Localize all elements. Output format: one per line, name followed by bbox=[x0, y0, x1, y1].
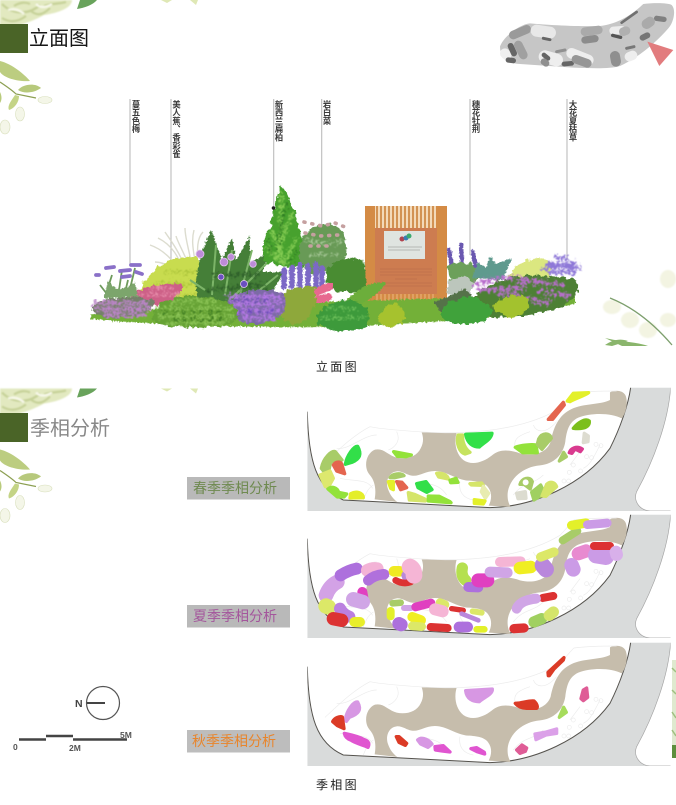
label: spring: 春季季相分析 bbox=[193, 480, 277, 496]
dark grass bbox=[434, 288, 475, 320]
plant labels bbox=[131, 99, 578, 159]
marker: view direction bbox=[647, 42, 673, 66]
cypress tree bbox=[263, 186, 305, 270]
coneflower shrub bbox=[299, 224, 346, 276]
canna leaves bbox=[196, 230, 284, 305]
grey foliage bbox=[447, 276, 474, 296]
title: seasonal analysis: 季相分析 bbox=[30, 417, 110, 440]
pink-purple flowers right bbox=[476, 277, 572, 303]
purple flowering mass bbox=[226, 290, 286, 324]
title marker: elevation bbox=[0, 24, 28, 53]
panel: autumn plan bbox=[307, 643, 671, 766]
autumn planting bbox=[333, 658, 588, 754]
pink astilbe bbox=[316, 286, 330, 300]
caption: seasonal: 季相图 bbox=[316, 778, 359, 792]
plant labels: 新西兰扁柏 bbox=[274, 99, 284, 143]
round shrub bbox=[326, 259, 368, 292]
right purple spikes bbox=[449, 245, 476, 270]
spring planting bbox=[320, 393, 589, 504]
panel: summer plan bbox=[307, 515, 671, 638]
label: summer: 夏季季相分析 bbox=[193, 608, 277, 624]
label: autumn bbox=[187, 730, 290, 752]
fern left of sign bbox=[345, 282, 386, 306]
pale yellow grass bbox=[508, 258, 552, 284]
pink heather bbox=[128, 284, 181, 305]
lavender bbox=[284, 264, 322, 287]
green hedge bbox=[152, 296, 238, 327]
caption: elevation: 立面图 bbox=[316, 359, 359, 374]
agave bbox=[472, 256, 512, 280]
decoration: second section foliage bbox=[0, 388, 198, 522]
scale bar bbox=[13, 730, 132, 753]
key plan minimap bbox=[500, 3, 674, 68]
sign board bbox=[365, 206, 447, 316]
yellow-green grass bbox=[138, 257, 212, 302]
plant labels: 岩白菜 bbox=[322, 99, 332, 126]
label: autumn: 秋季季相分析 bbox=[192, 733, 276, 749]
summer planting bbox=[326, 523, 617, 629]
lower fern right bbox=[440, 297, 492, 324]
title: elevation: 立面图 bbox=[29, 27, 89, 50]
scale bar: 0 bbox=[13, 742, 18, 752]
ornamental grass bbox=[150, 228, 215, 285]
elevation planting illustration bbox=[91, 186, 578, 331]
plant labels: 穗花牡荆 bbox=[471, 99, 481, 134]
verbena bbox=[100, 268, 135, 298]
decoration: lily of the valley bbox=[603, 270, 676, 346]
north arrow bbox=[75, 686, 120, 720]
panel: spring plan bbox=[307, 388, 671, 511]
scale bar: 5M bbox=[120, 730, 132, 740]
decoration: top-left foliage bbox=[0, 0, 198, 134]
scale bar: 2M bbox=[69, 743, 81, 753]
dark green mass bbox=[472, 275, 578, 317]
yellow-green fern bbox=[278, 286, 316, 324]
label: spring bbox=[187, 477, 290, 500]
low purple groundcover bbox=[93, 297, 153, 318]
decoration: right edge foliage bbox=[672, 660, 676, 758]
label: summer bbox=[187, 605, 290, 628]
ground lawn bbox=[91, 296, 575, 327]
elevation leader lines bbox=[130, 99, 567, 290]
title marker: seasons bbox=[0, 413, 28, 442]
north arrow: N bbox=[75, 698, 83, 710]
plant labels: 美人蕉、香彩雀 bbox=[172, 99, 182, 159]
plant labels: 大花夏枯草 bbox=[568, 99, 578, 143]
plant labels: 蔓五色梅 bbox=[131, 99, 141, 134]
canna flowers bbox=[196, 250, 256, 288]
